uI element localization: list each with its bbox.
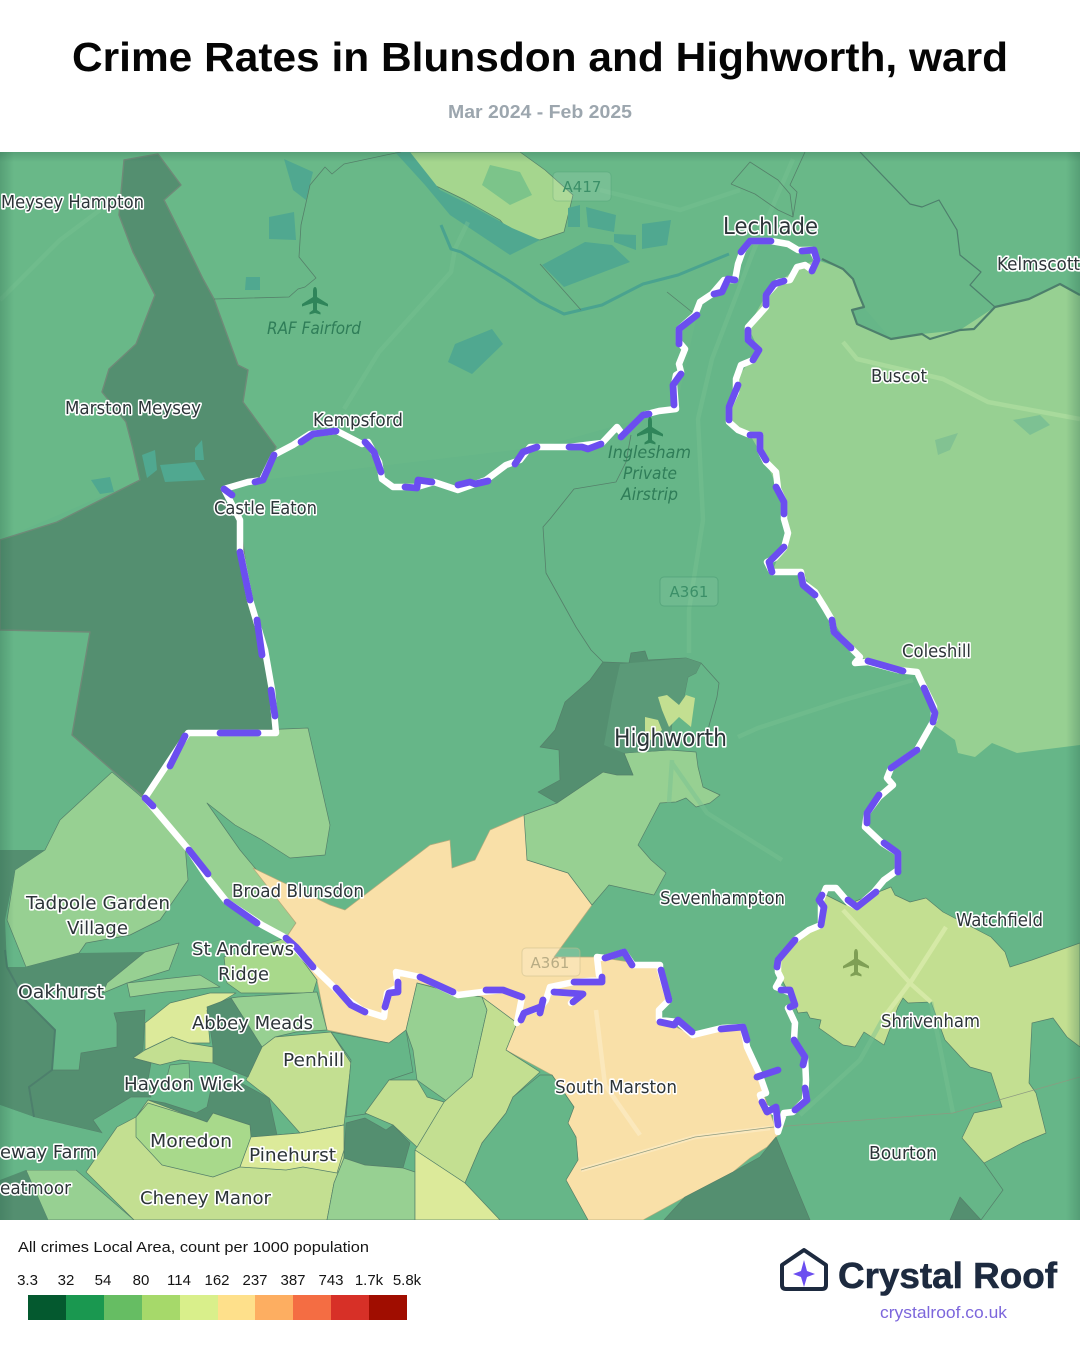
place labels: Kempsford [313,410,403,431]
legend values: 162 [204,1272,230,1289]
regions: Swindon urban neighbourhoods [0,938,588,1220]
place labels: Meysey Hampton [1,192,144,213]
place labels: Pinehurst [249,1145,336,1166]
legend title: All crimes Local Area, count per 1000 population [18,1239,369,1256]
title [72,34,1008,122]
legend values: 54 [95,1272,111,1289]
legend values: 387 [280,1272,306,1289]
ward boundary: white base line [145,241,934,1132]
place labels: Oakhurst [18,982,104,1003]
place labels: Broad Blunsdon [232,881,364,902]
place labels: Inglesham [608,443,691,463]
place labels: Penhill [283,1050,344,1071]
road shields [522,172,718,976]
rivers and boundaries [5,152,1080,1170]
place labels: Buscot [871,366,927,387]
place labels: Sevenhampton [660,888,785,909]
road shields: A361 [531,954,569,972]
legend values: 80 [133,1272,149,1289]
place labels: RAF Fairford [267,319,361,339]
title: Crime Rates in Blunsdon and Highworth, ward [72,34,1008,80]
place labels: Shrivenham [881,1011,980,1032]
legend values: 3.3 [17,1272,38,1289]
vignette edges [0,152,1080,1220]
place labels: Cheney Manor [140,1188,272,1209]
road: light roads on pale areas [581,342,1080,1170]
logo: Crystal Roof [780,1248,1058,1322]
place labels [0,192,1080,1209]
legend values: 32 [58,1272,74,1289]
road shields: A417 [563,178,601,196]
ward boundary: purple dashes [145,241,935,1125]
place labels: Ridge [218,964,269,985]
place labels: Airstrip [620,485,678,505]
place labels: Abbey Meads [192,1013,313,1034]
regions: rural and ward areas [0,152,1080,1220]
icon: airplane Inglesham [637,417,663,444]
place labels: eway Farm [0,1142,97,1163]
icon: house with star [782,1250,826,1289]
place labels: Lechlade [723,214,818,240]
water bodies [91,152,1050,494]
place labels: Highworth [614,724,727,752]
title: Mar 2024 - Feb 2025 [448,102,632,122]
place labels: Marston Meysey [65,398,201,419]
legend values: 114 [167,1272,191,1289]
legend values: 5.8k [393,1272,422,1289]
icon: airplane Shrivenham [843,949,869,976]
place labels: Tadpole Garden [25,893,170,914]
place labels: Coleshill [902,641,971,662]
road shields: A361 [670,583,708,601]
legend [17,1239,422,1320]
legend colour scale [28,1295,407,1320]
place labels: eatmoor [0,1178,72,1199]
website: crystalroof.co.uk [880,1304,1008,1322]
legend values [17,1272,422,1289]
place labels: Bourton [869,1143,937,1164]
place labels: Village [67,918,128,939]
legend values: 743 [318,1272,344,1289]
icon: airplane RAF Fairford [302,287,328,314]
place labels: Haydon Wick [124,1074,244,1095]
map: choropleth of crime rates [0,152,1080,1220]
legend values: 1.7k [355,1272,384,1289]
place labels: Watchfield [956,910,1043,931]
place labels: St Andrews [192,939,294,960]
place labels: Castle Eaton [214,498,317,519]
legend values: 237 [242,1272,268,1289]
roads [0,159,953,1115]
logo wordmark: Crystal Roof [838,1255,1058,1296]
place labels: Private [623,464,677,484]
place labels: Moredon [150,1131,232,1152]
place labels: South Marston [555,1077,677,1098]
